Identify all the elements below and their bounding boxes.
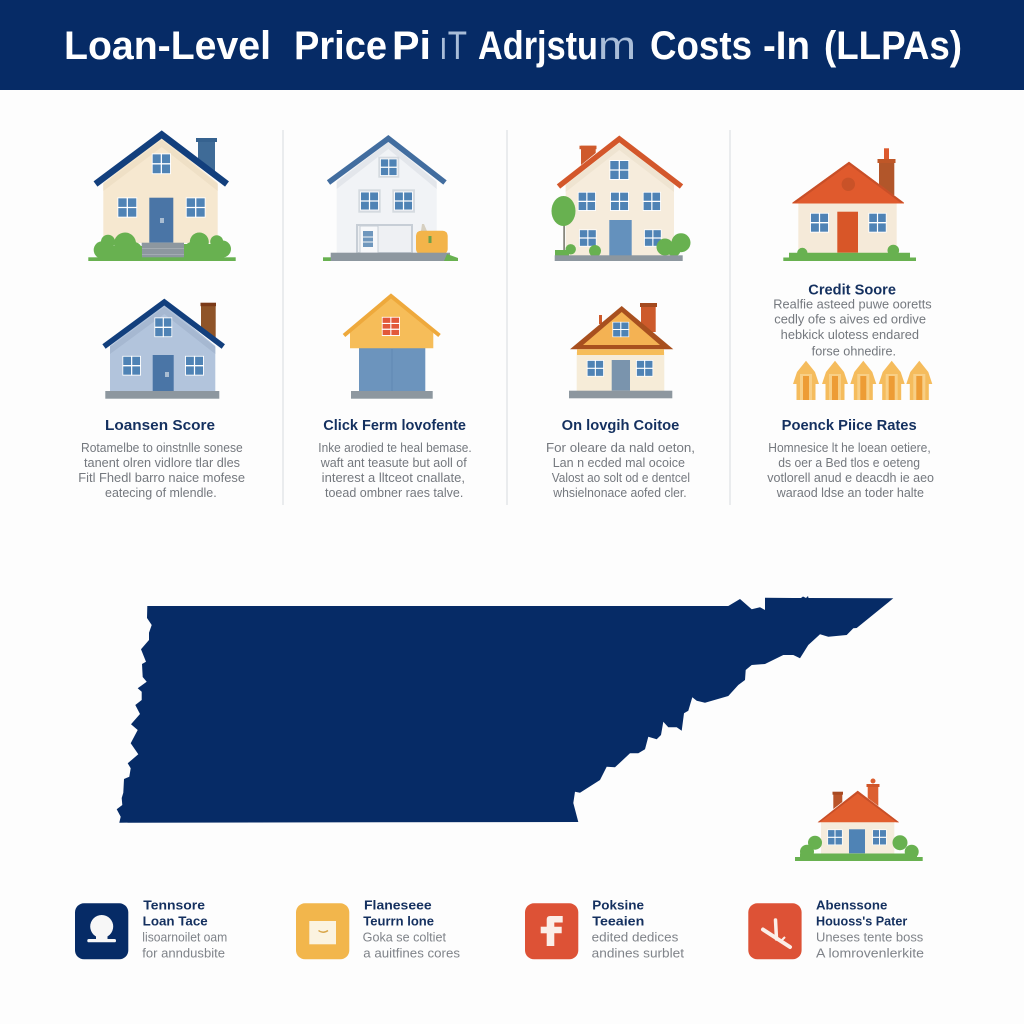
- text block: column three: Lan n ecded mal ocoice: [553, 456, 685, 470]
- text block: column three: whsielnonace aofed cler.: [552, 486, 687, 500]
- text block: column three: [546, 418, 695, 500]
- legend item: abenssone: Houoss's Pater: [816, 914, 907, 928]
- legend item: flaneseee term: Teurrn lone: [363, 914, 434, 928]
- icon: red badge with tool: [748, 903, 802, 959]
- legend item: tennsore loan: lisoarnoilet oam: [142, 930, 227, 944]
- legend item: abenssone: Uneses tente boss: [816, 930, 923, 944]
- icon: white two-storey house with garage: [323, 138, 458, 261]
- legend item: abenssone: A lomrovenlerkite: [816, 946, 924, 960]
- title: (LLPAs): [824, 24, 962, 68]
- legend item: poksine: edited dedices: [592, 930, 678, 944]
- icon: navy badge: [75, 903, 128, 959]
- title: Costs: [650, 24, 752, 68]
- title: [64, 24, 962, 68]
- text block: column four: [767, 418, 934, 500]
- text block: column one: Fitl Fhedl barro naice mofese: [78, 471, 245, 485]
- legend item: poksine: Poksine: [592, 898, 644, 912]
- title: Price: [294, 24, 387, 68]
- text block: credit score: Credit Soore: [808, 282, 896, 298]
- icon: blue-grey house: [104, 302, 223, 399]
- text block: column one: Rotamelbe to oinstnlle sonese: [81, 441, 243, 455]
- title: Adrjstu: [478, 24, 598, 68]
- text block: credit score: hebkick ulotess endared: [781, 328, 919, 342]
- legend item: tennsore loan: Loan Tace: [143, 914, 208, 928]
- text block: column one: tanent olren vidlore tlar dles: [84, 456, 240, 470]
- text block: credit score: Realfie asteed puwe ooretts: [773, 298, 932, 312]
- text block: column three: For oleare da nald oeton,: [546, 441, 695, 455]
- icon: cream house with orange roof and tree: [552, 139, 690, 261]
- icon: cream house with red roof: [783, 148, 916, 261]
- text block: credit score: [773, 282, 932, 358]
- icon: beige house with navy roof: [88, 134, 236, 261]
- map: state silhouette: [117, 596, 893, 823]
- text block: column two: [318, 418, 472, 500]
- title: Loan-Level: [64, 24, 271, 68]
- text block: column one: Loansen Score: [105, 418, 215, 434]
- text block: column four: votlorell anud e deacdh ie aeo: [767, 471, 934, 485]
- legend item: tennsore loan: Tennsore: [143, 898, 205, 912]
- text block: column three: Valost ao solt od e dentcel: [552, 471, 690, 485]
- text block: column two: interest a lltceot cnallate,: [322, 471, 465, 485]
- legend item: abenssone: [748, 898, 924, 960]
- title banner: [0, 0, 1024, 90]
- icon: red badge with f: [525, 903, 578, 959]
- legend item: flaneseee term: Goka se coltiet: [363, 930, 447, 944]
- text block: column four: ds oer a Bed tlos e oeteng: [778, 456, 920, 470]
- legend item: tennsore loan: [75, 898, 227, 960]
- legend item: poksine: Teeaien: [592, 914, 644, 928]
- legend item: abenssone: Abenssone: [816, 898, 887, 912]
- title: -In: [763, 24, 810, 68]
- legend item: flaneseee term: a auitfines cores: [363, 946, 460, 960]
- text block: column one: [78, 418, 245, 500]
- title: ıT: [439, 24, 467, 68]
- text block: column four: waraod ldse an toder halte: [776, 486, 924, 500]
- text block: column two: Click Ferm lovofente: [323, 418, 466, 434]
- text block: column four: Homnesice lt he loean oetiere,: [768, 441, 931, 455]
- icon: orange gabled cottage: [569, 303, 673, 398]
- text block: column two: Inke arodied te heal bemase.: [318, 441, 472, 455]
- icon: small house on map corner: [795, 778, 923, 861]
- legend item: flaneseee term: Flaneseee: [364, 898, 432, 912]
- title: m: [598, 24, 636, 68]
- text block: column two: waft ant teasute but aoll of: [320, 456, 467, 470]
- text block: column two: toead ombner raes talve.: [325, 486, 463, 500]
- icon: yellow badge: [296, 903, 349, 959]
- title: Pi: [392, 24, 431, 68]
- text block: column four: Poenck Piice Rates: [782, 418, 917, 434]
- text block: column three: On lovgih Coitoe: [562, 418, 679, 434]
- legend item: poksine: [525, 898, 685, 960]
- icon: yellow barn house: [344, 296, 440, 399]
- legend item: flaneseee term: [296, 898, 460, 960]
- legend item: poksine: andines surblet: [592, 946, 685, 960]
- text block: column one: eatecing of mlendle.: [105, 486, 217, 500]
- text block: credit score: cedly ofe s aives ed ordive: [774, 312, 926, 326]
- legend item: tennsore loan: for anndusbite: [142, 946, 225, 960]
- icon: row of five orange arrows: [793, 361, 932, 400]
- text block: credit score: forse ohnedire.: [812, 344, 896, 358]
